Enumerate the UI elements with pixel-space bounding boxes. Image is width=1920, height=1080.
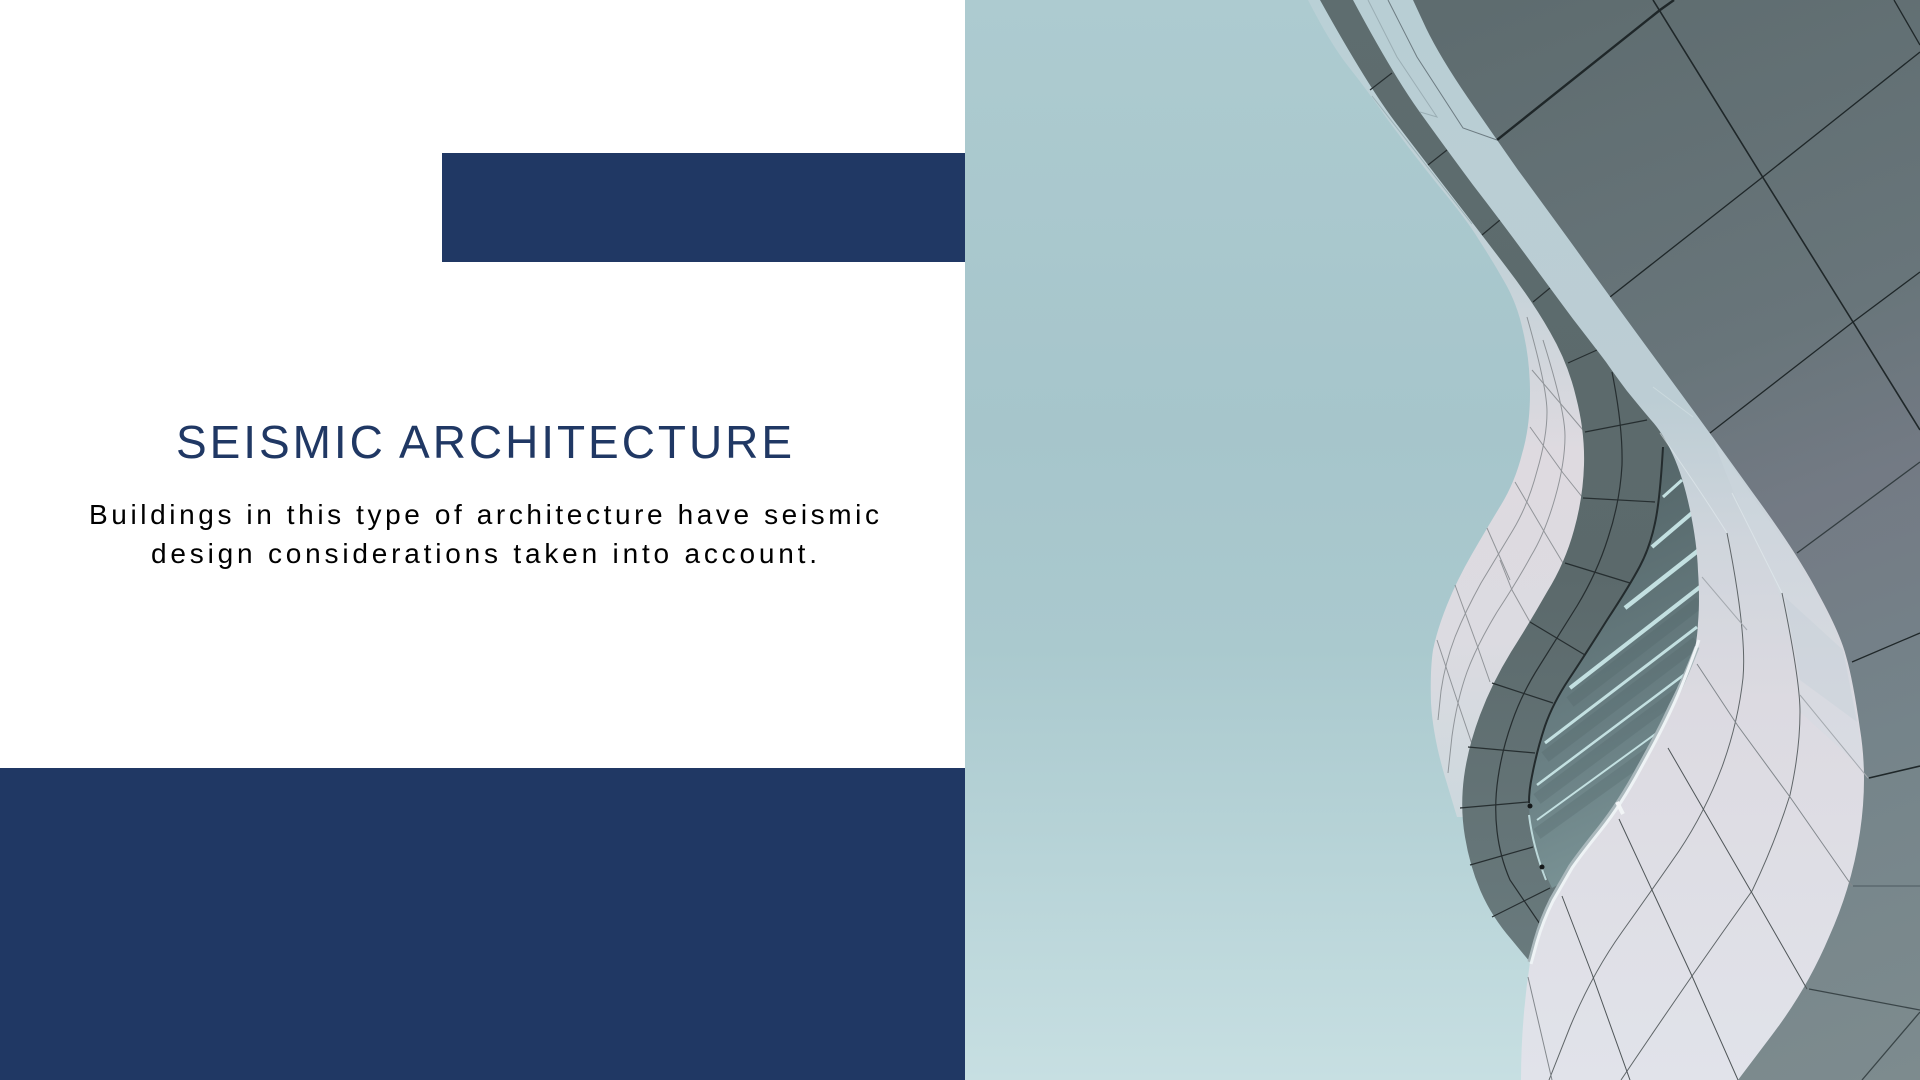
- building: white twisting ribbon panels: [1353, 0, 1868, 1080]
- building: grey tiled facade: [1400, 0, 1920, 1080]
- decorative navy block: bottom: [0, 768, 965, 1080]
- photo sky: [965, 0, 1920, 1080]
- body text: [89, 499, 879, 569]
- building: balcony rail: [1530, 640, 1699, 964]
- body text: design considerations taken into account.: [151, 538, 817, 569]
- building: louvre slats: [1528, 440, 1720, 888]
- title: SEISMIC ARCHITECTURE: [176, 416, 792, 468]
- building: pale curved bulge panel: [1308, 0, 1700, 817]
- building: dark recessed band: [1320, 0, 1700, 962]
- body text: Buildings in this type of architecture have seismic: [89, 499, 879, 530]
- panel: white text background: [0, 0, 965, 1080]
- photo: curving white building against pale sky: [965, 0, 1920, 1080]
- decorative navy bar: top: [442, 153, 965, 262]
- ribbon: outer pale facets: [1712, 436, 1864, 770]
